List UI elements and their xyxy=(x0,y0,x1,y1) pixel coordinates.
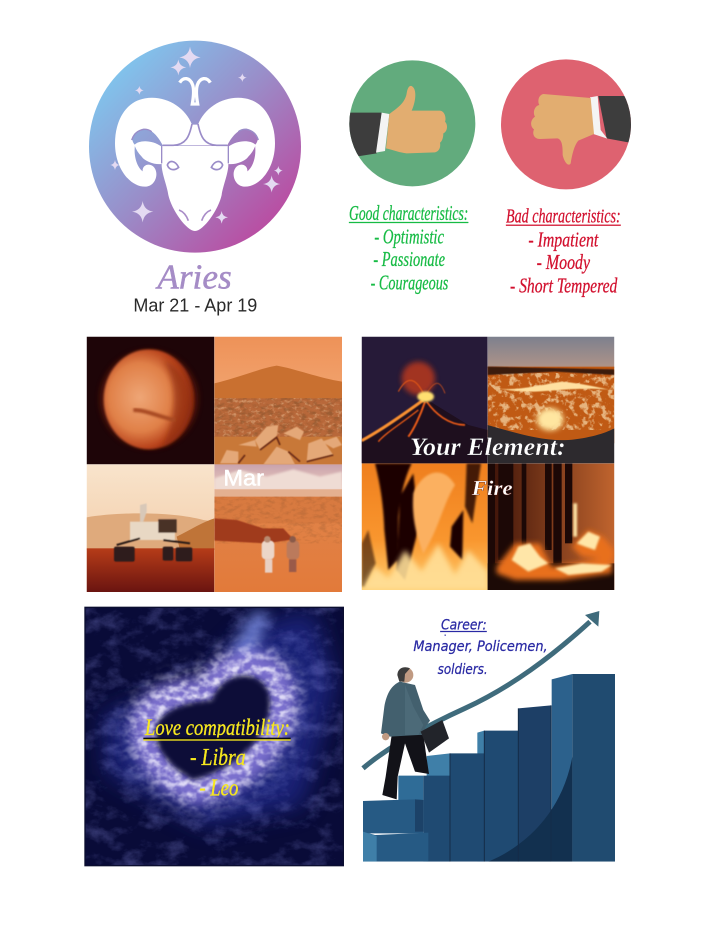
image: astronauts on Mars xyxy=(214,464,342,592)
icon: businessman climbing xyxy=(381,667,449,799)
text: career: Manager, Policemen, xyxy=(413,639,548,655)
panel: element fire collage xyxy=(362,337,614,590)
text: career: soldiers. xyxy=(438,662,488,678)
text: good characteristics: - Passionate xyxy=(373,249,445,271)
panel: characteristics xyxy=(347,59,633,298)
text: love compatibility list: - Libra xyxy=(190,744,246,771)
icon: thumbs down xyxy=(501,59,633,189)
frame xyxy=(85,607,343,866)
text: bad characteristics: - Short Tempered xyxy=(510,276,618,298)
text: good characteristics xyxy=(349,203,468,294)
image: Mars rover xyxy=(87,464,214,592)
image: forest fire xyxy=(488,463,614,590)
text: career xyxy=(413,617,548,678)
image: planet Mars xyxy=(87,337,214,464)
image: flames xyxy=(362,463,488,590)
text: bad characteristics: - Moody xyxy=(537,252,591,274)
image: nebula heart xyxy=(85,607,343,866)
panel: career xyxy=(363,611,615,862)
text: career: Career: xyxy=(441,617,487,633)
image: burning crater xyxy=(488,337,614,463)
text: love compatibility list: - Leo xyxy=(199,775,238,802)
text: bad characteristics: Bad characteristics: xyxy=(506,206,621,228)
text: bad characteristics: - Impatient xyxy=(528,230,599,252)
text: fire: Fire xyxy=(471,476,513,500)
text: bad characteristics xyxy=(506,206,621,298)
icon: thumbs up xyxy=(347,60,475,186)
image: Martian mountain xyxy=(214,337,342,464)
heading: Aries: Aries xyxy=(155,258,232,296)
panel: Mars collage xyxy=(87,337,342,592)
text: Mar label: Mar xyxy=(223,465,264,490)
text: good characteristics: - Optimistic xyxy=(374,226,444,248)
Aries gradient circle xyxy=(89,41,301,253)
chart: rising bars xyxy=(363,674,615,862)
text: good characteristics: Good characteristics: xyxy=(349,203,468,225)
text: good characteristics: - Courageous xyxy=(371,272,448,294)
icon: ram head xyxy=(115,98,275,231)
icon: Aries glyph xyxy=(180,79,210,104)
text: your element: Your Element: xyxy=(410,433,566,461)
arrow: growth curve xyxy=(363,611,599,768)
text: love compatibility list: Love compatibility: xyxy=(144,715,290,741)
text: love compatibility list xyxy=(143,715,291,802)
image: volcano xyxy=(362,337,488,463)
text: date range: Mar 21 - Apr 19 xyxy=(133,295,257,316)
panel: Aries sign xyxy=(89,41,301,316)
panel: love compatibility xyxy=(85,607,343,866)
icon: sparkles xyxy=(110,47,283,224)
